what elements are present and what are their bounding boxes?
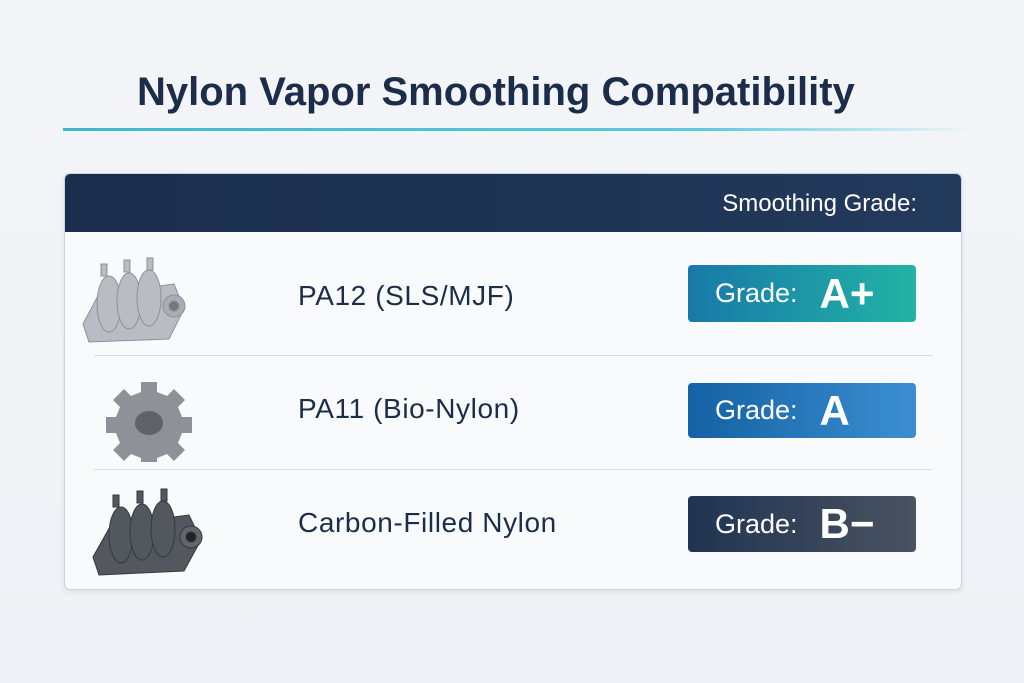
- badge: A+: Grade:: [715, 278, 798, 308]
- label: PA12: PA12 (SLS/MJF): [298, 280, 514, 311]
- table header: [65, 174, 961, 232]
- panel: compatibility table: [64, 173, 962, 590]
- title: Nylon Vapor Smoothing Compatibility: [137, 70, 855, 114]
- label: Carbon-Filled: Carbon-Filled Nylon: [298, 507, 557, 538]
- badge: B-: B−: [820, 500, 874, 547]
- label: PA11: PA11 (Bio-Nylon): [298, 393, 520, 424]
- badge: B-: Grade:: [715, 508, 798, 538]
- badge: A+: A+: [820, 270, 874, 316]
- badge: A: A: [820, 386, 850, 434]
- badge: A+: [688, 265, 916, 322]
- badge: B-: [688, 496, 916, 552]
- icon: light manifold: [82, 258, 186, 342]
- icon: gear: [106, 382, 192, 462]
- badge: A: Grade:: [715, 395, 798, 425]
- icon: dark manifold: [92, 488, 202, 576]
- table header: Smoothing Grade:: [722, 190, 917, 217]
- badge: A: [688, 383, 916, 438]
